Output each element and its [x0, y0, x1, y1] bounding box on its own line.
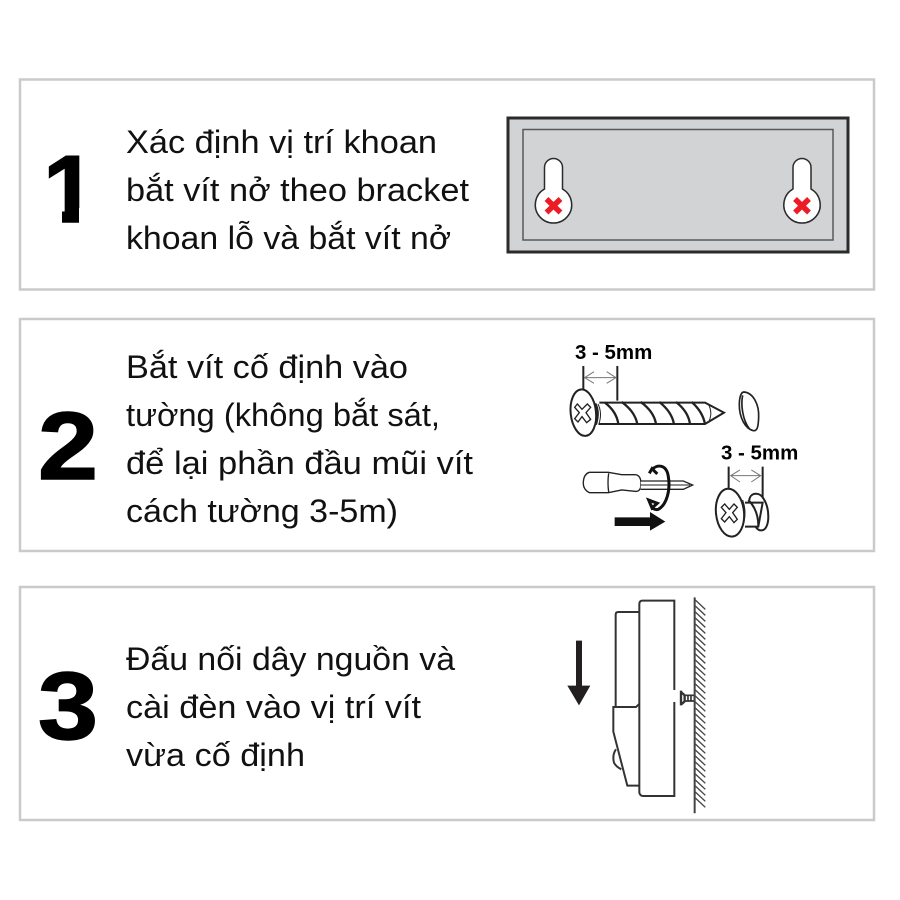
panel: step 1: [20, 80, 874, 290]
icon: long screw: [568, 388, 724, 437]
text: step 2 instructions: tường (không bắt sát,: [126, 397, 440, 433]
icon: wall screw: [681, 691, 694, 705]
icon: hatched wall: [695, 597, 705, 813]
text: step 1 instructions: khoan lỗ và bắt vít nở: [126, 220, 451, 256]
icon: screw in wall: [714, 487, 768, 538]
icon: left keyhole with red cross: [535, 158, 572, 223]
illustration: bracket with keyholes: [508, 118, 848, 252]
step number 3: 3: [38, 653, 98, 760]
panel: step 2: [20, 319, 874, 551]
text: step 1 instructions: [126, 124, 469, 256]
text: step 3 instructions: cài đèn vào vị trí vít: [126, 689, 421, 725]
text: step 1 instructions: bắt vít nở theo bracket: [126, 172, 469, 208]
text: step 3 instructions: Đấu nối dây nguồn và: [126, 641, 455, 677]
panel: step 3: [20, 587, 874, 820]
dimension marker upper: [583, 366, 617, 401]
text: step 2 instructions: [126, 349, 473, 529]
icon: rotation arrow: [649, 466, 669, 510]
icon: down arrow: [567, 641, 590, 705]
icon: lamp body: [613, 601, 674, 796]
illustration: lamp hung on wall: [567, 597, 705, 813]
step number 1: 1: [43, 136, 96, 243]
label: 3 - 5mm lower: 3 - 5mm: [721, 442, 798, 464]
label: 3 - 5mm upper: 3 - 5mm: [575, 342, 652, 364]
icon: right keyhole with red cross: [784, 158, 820, 223]
illustration: screw mounting steps: [568, 342, 798, 538]
text: step 2 instructions: cách tường 3-5m): [126, 493, 398, 529]
text: step 3 instructions: [126, 641, 455, 773]
step number 2: 2: [38, 393, 98, 500]
icon: direction arrow: [615, 512, 665, 531]
text: step 2 instructions: Bắt vít cố định vào: [126, 349, 408, 385]
text: step 1 instructions: Xác định vị trí khoan: [126, 124, 437, 160]
icon: screwdriver: [583, 472, 693, 493]
dimension marker lower: [729, 467, 763, 500]
text: step 2 instructions: để lại phần đầu mũi vít: [126, 445, 473, 481]
text: step 3 instructions: vừa cố định: [126, 737, 305, 773]
icon: wall anchor cap: [739, 392, 759, 431]
